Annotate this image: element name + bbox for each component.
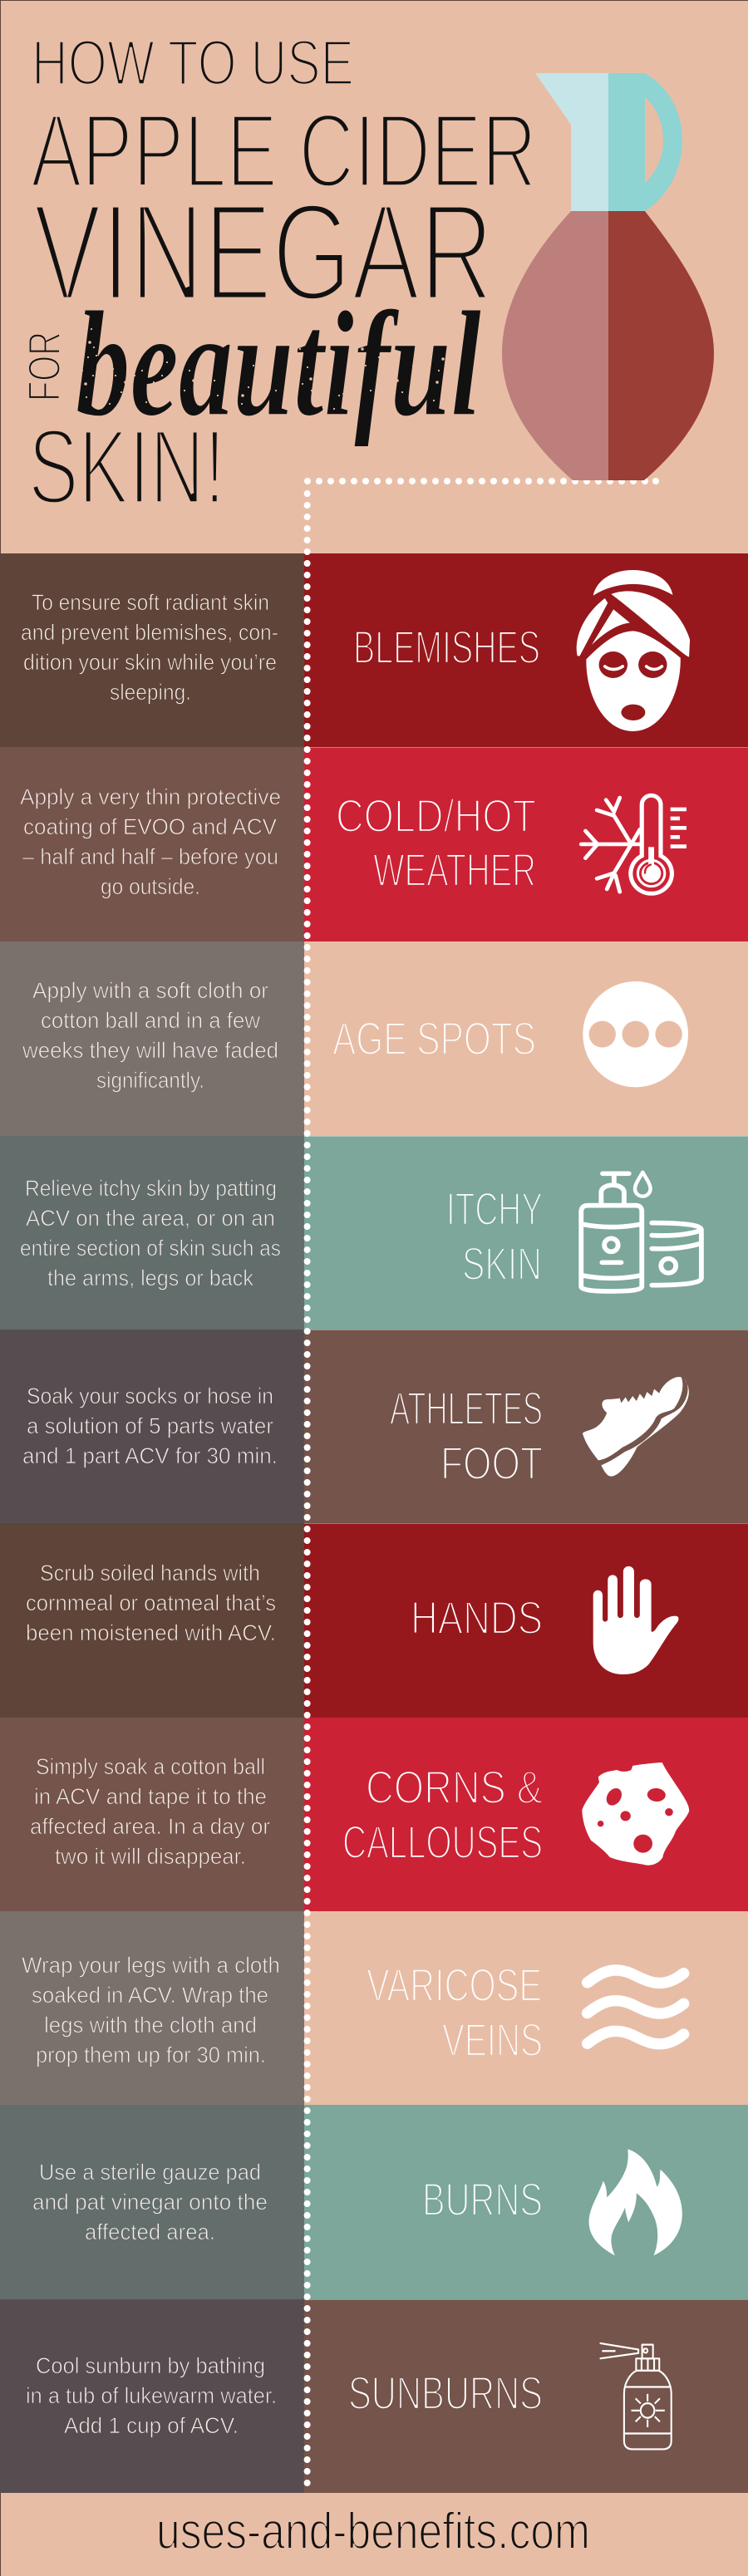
icon: flame <box>589 2149 682 2255</box>
panel: burns <box>32 2149 682 2255</box>
panel: corns and callouses <box>30 1754 689 1869</box>
description: varicose veins: legs with the cloth and <box>44 2013 257 2038</box>
dotted connector line <box>308 469 657 2493</box>
description: itchy skin: entire section of skin such as <box>20 1236 281 1261</box>
icon: callous <box>582 1762 689 1866</box>
panel: age spots <box>22 978 688 1093</box>
description: athletes foot: and 1 part ACV for 30 min. <box>22 1443 278 1468</box>
label: cold/hot weather <box>336 789 536 896</box>
footer website: uses-and-benefits.com <box>156 2503 590 2560</box>
description: athletes foot <box>22 1384 278 1468</box>
description: itchy skin <box>20 1176 281 1290</box>
title: SKIN! <box>28 408 225 527</box>
description: burns <box>32 2160 268 2244</box>
title: HOW TO USE <box>32 27 354 99</box>
description: age spots <box>22 978 278 1093</box>
description: blemishes: dition your skin while you’re <box>23 650 277 675</box>
panel: athletes foot <box>22 1377 689 1489</box>
title: VINEGAR <box>33 175 494 330</box>
label: age spots: AGE SPOTS <box>332 1012 536 1064</box>
panel: cold/hot weather <box>20 784 686 899</box>
description: corns and callouses: affected area. In a day or <box>30 1814 270 1839</box>
label: itchy skin: ITCHY <box>446 1182 543 1235</box>
description: corns and callouses: in ACV and tape it to the <box>34 1784 267 1809</box>
label: varicose veins: VEINS <box>442 2013 543 2066</box>
description: athletes foot: Soak your socks or hose in <box>27 1384 273 1408</box>
description: corns and callouses <box>30 1754 270 1869</box>
description: itchy skin: the arms, legs or back <box>47 1266 253 1290</box>
description: hands: been moistened with ACV. <box>26 1620 276 1645</box>
description: itchy skin: Relieve itchy skin by patting <box>25 1176 277 1201</box>
icon: face mask <box>577 570 690 731</box>
description: cold/hot weather: coating of EVOO and ACV <box>23 814 277 839</box>
description: burns: and pat vinegar onto the <box>32 2190 268 2215</box>
label: sunburns: SUNBURNS <box>348 2367 543 2419</box>
description: varicose veins: Wrap your legs with a cloth <box>22 1953 280 1978</box>
icon: spotted circle <box>583 981 688 1087</box>
description: itchy skin: ACV on the area, or on an <box>26 1206 275 1231</box>
panel: hands <box>26 1561 678 1674</box>
label: corns and callouses <box>342 1761 543 1868</box>
description: cold/hot weather: go outside. <box>101 874 200 899</box>
description: athletes foot: a solution of 5 parts water <box>27 1413 273 1438</box>
title <box>18 27 537 527</box>
panel: sunburns <box>26 2343 672 2449</box>
label: varicose veins <box>367 1959 543 2066</box>
description: cold/hot weather: – half and half – before you <box>22 844 278 869</box>
description: cold/hot weather: Apply a very thin protective <box>20 784 281 809</box>
label: itchy skin <box>446 1182 543 1290</box>
description: burns: affected area. <box>85 2220 215 2244</box>
icon: raised hand <box>593 1566 678 1674</box>
icon: wavy veins <box>588 1970 684 2044</box>
icon: sunscreen spray <box>600 2343 672 2449</box>
description: age spots: Apply with a soft cloth or <box>32 978 268 1003</box>
description: hands: cornmeal or oatmeal that’s <box>26 1590 276 1615</box>
description: sunburns: Cool sunburn by bathing <box>36 2353 265 2378</box>
description: sunburns <box>26 2353 277 2438</box>
label: athletes foot <box>390 1382 543 1489</box>
label: athletes foot: FOOT <box>440 1437 543 1489</box>
description: blemishes: To ensure soft radiant skin <box>32 590 269 615</box>
description: age spots: weeks they will have faded <box>22 1038 278 1063</box>
description: hands <box>26 1561 276 1645</box>
icon: lotion bottle and jar <box>581 1172 701 1291</box>
label: cold/hot weather: COLD/HOT <box>336 789 536 842</box>
description: corns and callouses: Simply soak a cotton ball <box>36 1754 265 1779</box>
label: cold/hot weather: WEATHER <box>373 843 536 896</box>
title: APPLE CIDER <box>31 92 537 209</box>
icon: vinegar jug <box>502 73 714 480</box>
label: corns and callouses: CORNS & <box>366 1761 543 1813</box>
description: varicose veins <box>22 1953 280 2067</box>
description: age spots: significantly. <box>96 1068 204 1093</box>
description: blemishes <box>21 590 278 705</box>
label: blemishes: BLEMISHES <box>353 621 540 673</box>
label: itchy skin: SKIN <box>462 1237 542 1290</box>
description: blemishes: and prevent blemishes, con- <box>21 620 278 645</box>
description: sunburns: in a tub of lukewarm water. <box>26 2383 277 2408</box>
label: hands: HANDS <box>411 1591 543 1644</box>
panel: itchy skin <box>20 1172 701 1291</box>
description: varicose veins: prop them up for 30 min. <box>36 2043 266 2067</box>
description: corns and callouses: two it will disappear. <box>55 1844 246 1869</box>
label: burns: BURNS <box>422 2173 543 2225</box>
description: varicose veins: soaked in ACV. Wrap the <box>32 1983 268 2008</box>
title: FOR <box>18 332 70 401</box>
description: sunburns: Add 1 cup of ACV. <box>64 2413 239 2438</box>
icon: running shoe <box>583 1377 689 1477</box>
description: blemishes: sleeping. <box>110 680 191 705</box>
description: cold/hot weather <box>20 784 281 899</box>
panel: varicose veins <box>22 1953 684 2067</box>
panel: row backgrounds <box>0 553 748 2493</box>
label: corns and callouses: CALLOUSES <box>342 1816 543 1868</box>
icon: snowflake and thermometer <box>581 795 686 893</box>
label: varicose veins: VARICOSE <box>367 1959 542 2011</box>
panel: blemishes <box>21 570 690 731</box>
description: hands: Scrub soiled hands with <box>40 1561 260 1585</box>
description: age spots: cotton ball and in a few <box>41 1008 260 1033</box>
description: burns: Use a sterile gauze pad <box>39 2160 261 2185</box>
title: beautiful <box>76 281 481 448</box>
label: athletes foot: ATHLETES <box>390 1382 543 1434</box>
